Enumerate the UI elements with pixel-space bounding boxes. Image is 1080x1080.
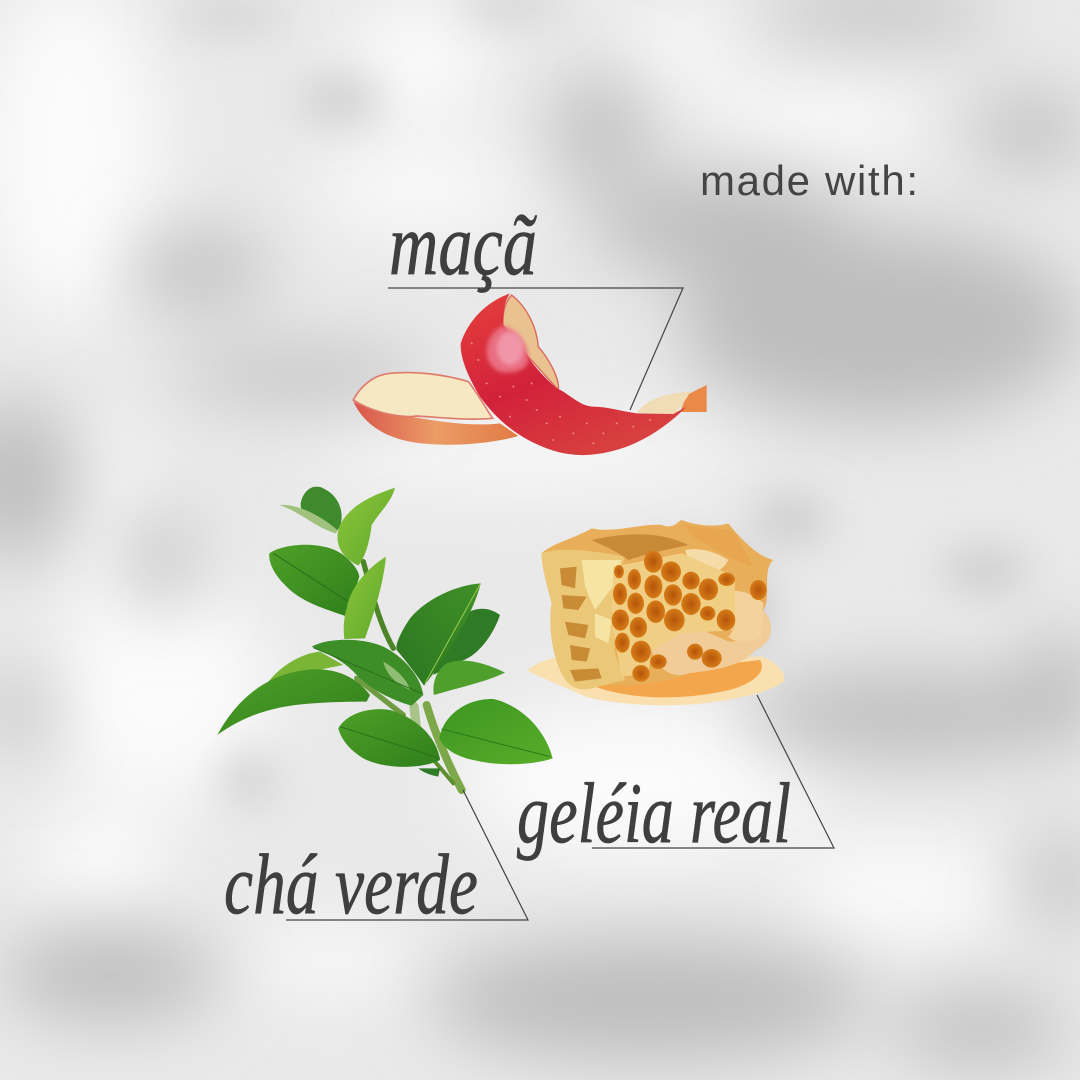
big upper right leaf [396, 583, 481, 686]
label: geléia real: geléia real [517, 765, 791, 861]
lower center leaf [418, 768, 440, 777]
leader line: maçã [388, 288, 683, 410]
label: maçã [388, 197, 683, 410]
small right leaf [433, 661, 505, 695]
small upright leaf [344, 557, 386, 639]
left peel flesh [353, 373, 493, 419]
right tail flesh [637, 392, 690, 414]
left peel underside [353, 402, 518, 445]
lower right leaf [439, 699, 553, 764]
comb left face [542, 550, 625, 689]
leader line: geléia real [592, 695, 834, 848]
icon: green tea sprig [217, 487, 553, 790]
speckles [471, 342, 651, 444]
long left leaf [217, 669, 370, 735]
label: maçã: maçã [389, 197, 537, 294]
leader line: chá verde [286, 790, 528, 920]
center glossy leaf [312, 640, 423, 706]
heading: made with: made with: [700, 157, 918, 204]
label: geléia real [517, 695, 834, 861]
top bud [301, 487, 342, 532]
icon: apple peel [353, 293, 707, 455]
pale wax right side [652, 610, 771, 675]
honeycomb cells [612, 551, 767, 682]
pink patch [487, 326, 529, 373]
comb wall backing [612, 553, 735, 677]
right tail [680, 385, 707, 412]
inner flap [503, 295, 559, 390]
top crust [592, 534, 688, 560]
main red strip [461, 293, 687, 455]
icon: honeycomb [528, 520, 784, 705]
comb body [542, 520, 773, 689]
stems [357, 562, 462, 790]
upper left dark leaf [269, 545, 359, 617]
left far light leaf [265, 652, 343, 687]
honey puddle [528, 657, 784, 705]
back right dark leaf [433, 609, 500, 675]
upper light leaf [337, 488, 395, 566]
label: chá verde: chá verde [224, 836, 478, 932]
label: chá verde [224, 790, 528, 932]
